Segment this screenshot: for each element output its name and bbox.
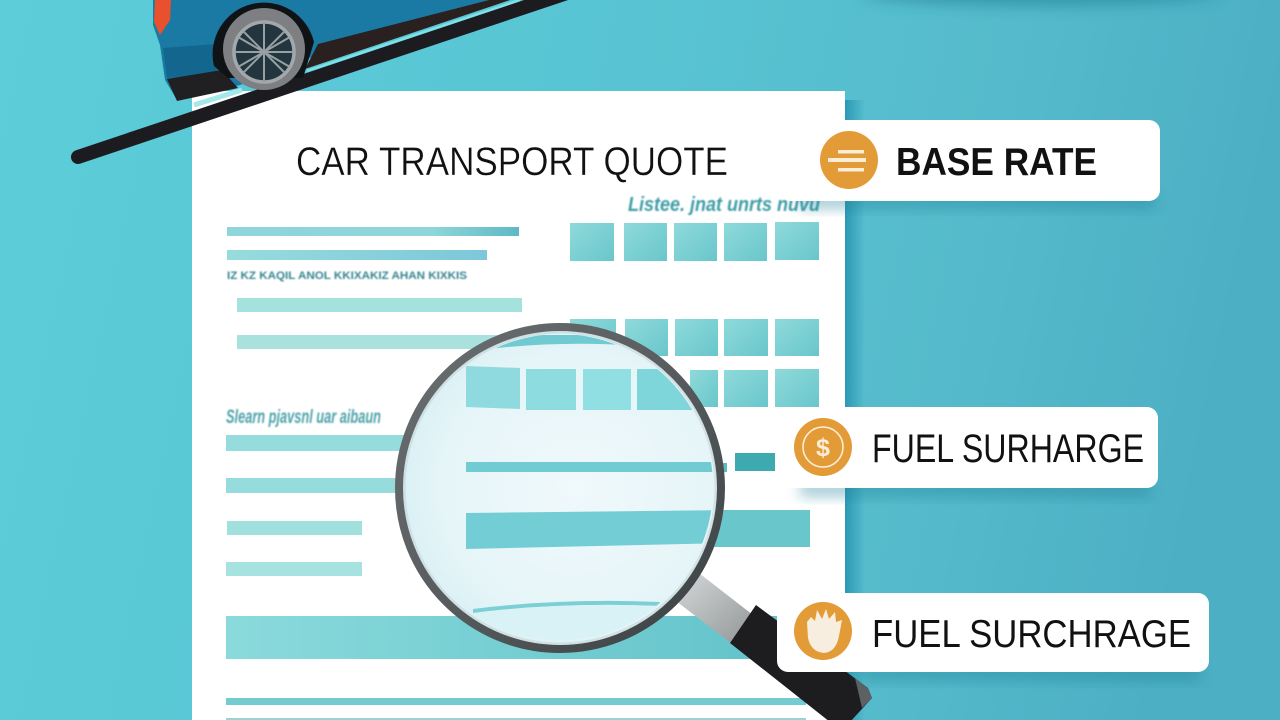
- label: base rate: BASE RATE: [896, 141, 1097, 184]
- pill shadows: [800, 194, 1200, 680]
- magnified content: [466, 335, 730, 650]
- label: fuel surcharge two: FUEL SURCHRAGE: [872, 613, 1191, 656]
- handle: black grip: [730, 605, 872, 720]
- document edge shadow: [845, 100, 865, 720]
- heading: document title: CAR TRANSPORT QUOTE: [296, 140, 728, 184]
- icon: base rate lines: [820, 131, 878, 189]
- handle: metal collar: [672, 570, 762, 650]
- table squares: row three: [690, 369, 819, 407]
- rear panel: [163, 44, 222, 78]
- table squares: row two: [570, 319, 819, 356]
- handle: grip tip: [855, 678, 872, 708]
- lens ring: [399, 327, 721, 649]
- lens glass: [402, 329, 718, 645]
- label: fuel surcharge one: FUEL SURHARGE: [872, 427, 1144, 471]
- lines: top left block: IZ KZ KAQIL ANOL KKIXAKIZ AHAN KIXKIS: [227, 270, 467, 282]
- table squares: row one: [570, 222, 819, 261]
- script caption: left section: Slearn pjavsnl uar aibaun: [226, 407, 381, 428]
- tail light: [154, 0, 171, 35]
- callout: fuel surcharge one: [780, 407, 1158, 488]
- light slit under car: [194, 0, 520, 105]
- callout: base rate: [780, 120, 1160, 201]
- rear bumper: [167, 70, 238, 101]
- panel: quote document: [192, 91, 845, 720]
- lines: top left block: [227, 227, 567, 349]
- icon: fuel coin: $: [816, 434, 830, 462]
- footer lines: [226, 698, 806, 720]
- wheel: [213, 3, 314, 90]
- side sill: [305, 0, 516, 69]
- ramp: [78, 0, 570, 157]
- script caption: top right: Listee. jnat unrts nuvu: [628, 194, 820, 216]
- top right shadow: [860, 0, 1220, 5]
- lines: left section: [226, 435, 416, 576]
- lines: right of lens: [700, 453, 810, 547]
- callout: fuel surcharge two: [777, 593, 1209, 672]
- car body: [153, 0, 500, 100]
- icon: hand: [794, 602, 852, 660]
- icon: fuel coin: [794, 418, 852, 476]
- magnifying glass: [399, 327, 872, 720]
- large total bar: [226, 616, 786, 659]
- car: [153, 0, 520, 105]
